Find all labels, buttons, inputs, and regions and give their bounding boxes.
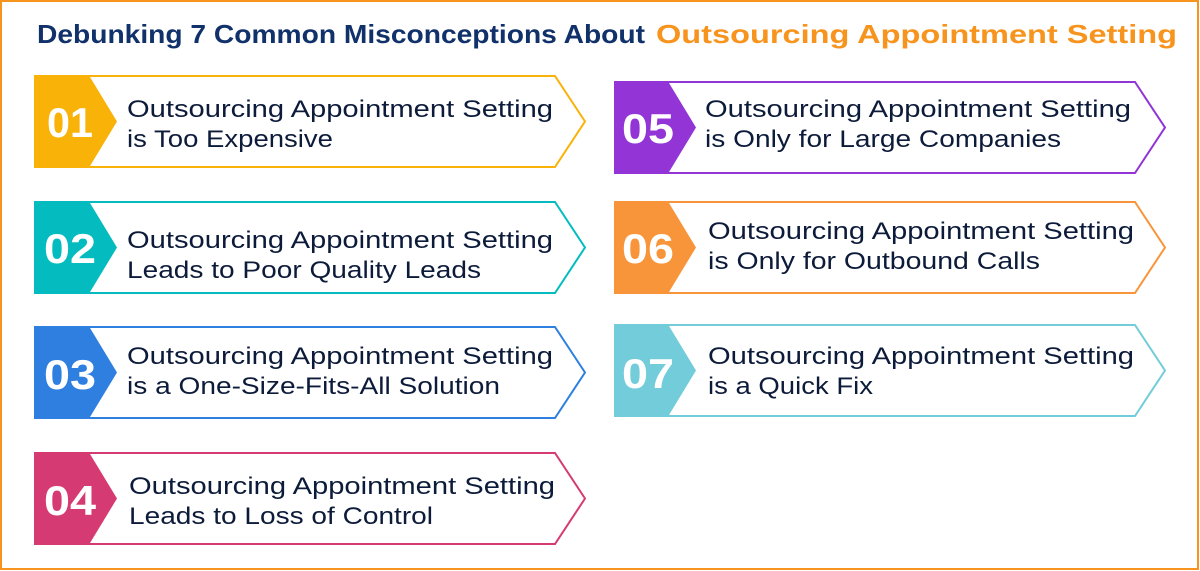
card 06 [615, 202, 1165, 293]
card 05: 05 [622, 105, 674, 152]
card 07: Outsourcing Appointment Setting [708, 343, 1134, 370]
card 06: Outsourcing Appointment Setting [708, 218, 1134, 245]
card 05: Outsourcing Appointment Setting [705, 96, 1131, 123]
card 03: 03 [44, 351, 96, 398]
card 06: 06 [622, 225, 674, 272]
card 04: Outsourcing Appointment Setting [129, 473, 555, 500]
title: Outsourcing Appointment Setting [656, 19, 1177, 49]
card 04: Leads to Loss of Control [129, 503, 433, 530]
card 02: 02 [44, 225, 96, 272]
card 05: is Only for Large Companies [705, 126, 1061, 153]
card 07 [615, 325, 1165, 416]
card 01: Outsourcing Appointment Setting [127, 96, 553, 123]
card 02: Leads to Poor Quality Leads [127, 257, 481, 284]
card 02 [35, 202, 585, 293]
card 06: is Only for Outbound Calls [708, 248, 1040, 275]
card 04 [35, 453, 585, 544]
card 01: 01 [47, 99, 93, 146]
title [37, 19, 1177, 49]
card 03: is a One-Size-Fits-All Solution [127, 373, 500, 400]
card 07: is a Quick Fix [708, 373, 873, 400]
card 03 [35, 327, 585, 418]
card 03: Outsourcing Appointment Setting [127, 343, 553, 370]
card 01: is Too Expensive [127, 126, 333, 153]
card 02: Outsourcing Appointment Setting [127, 227, 553, 254]
card 05 [615, 82, 1165, 173]
title: Debunking 7 Common Misconceptions About [37, 19, 645, 49]
card 04: 04 [44, 477, 97, 524]
card 01 [35, 76, 585, 167]
card 07: 07 [622, 350, 674, 397]
